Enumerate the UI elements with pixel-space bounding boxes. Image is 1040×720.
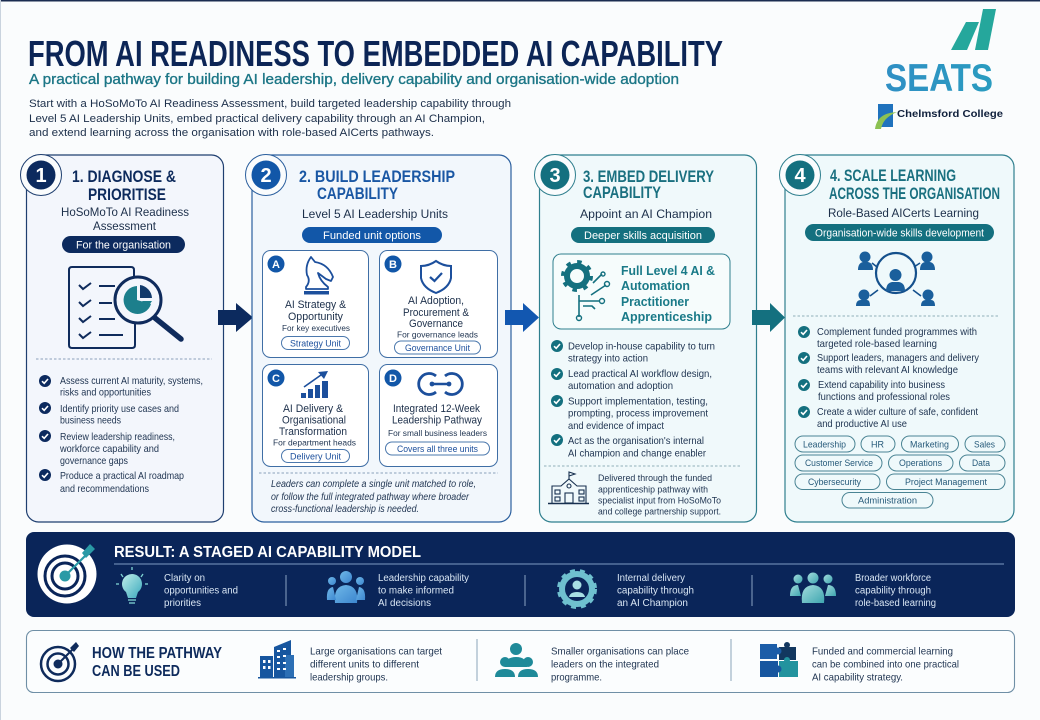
step badge 3 — [534, 154, 576, 196]
card A — [262, 250, 368, 358]
result item: clarity: Clarity on — [164, 573, 205, 584]
card B: Governance Unit — [405, 343, 470, 353]
role chips: Data — [972, 458, 991, 468]
bullets: targeted role-based learning — [817, 339, 937, 350]
note: Leaders can complete a single unit matched to role, — [271, 479, 476, 490]
card C: C — [272, 373, 280, 385]
logo: Chelmsford College: Chelmsford College — [897, 108, 1003, 120]
card C: For department heads — [273, 438, 356, 448]
bullets: Lead practical AI workflow design, — [568, 369, 712, 380]
bullets: strategy into action — [568, 354, 648, 364]
icon: teal people — [495, 643, 538, 677]
heading: CAPABILITY — [583, 183, 662, 202]
subheading: Role-Based AICerts Learning — [828, 206, 979, 220]
bullets: automation and adoption — [568, 381, 673, 392]
item: smaller organisations: programme. — [551, 672, 602, 684]
result item: internal delivery: an AI Champion — [617, 598, 688, 609]
intro text: Start with a HoSoMoTo AI Readiness Assessment, build targeted leadership capability through — [29, 98, 511, 110]
icon: light bulb — [116, 567, 148, 603]
result item: broader workforce: Broader workforce — [855, 573, 931, 584]
icon: shield — [421, 261, 451, 293]
result item: internal delivery: Internal delivery — [617, 573, 685, 584]
result item: leadership capability — [327, 571, 469, 609]
heading: CAN BE USED — [92, 663, 180, 680]
role chips: Leadership — [803, 440, 846, 450]
card C: Organisational — [282, 414, 346, 426]
pill — [62, 236, 185, 253]
bullets: Produce a practical AI roadmap — [60, 471, 184, 482]
role chips — [795, 436, 1005, 508]
heading — [583, 167, 715, 202]
card C: AI Delivery & — [283, 403, 344, 415]
card D: D — [389, 373, 397, 385]
step badge 4 — [780, 154, 820, 196]
panel: 4 scale learning — [780, 154, 1014, 522]
logo: Chelmsford College — [875, 104, 1003, 129]
icon: chain link — [419, 374, 462, 395]
icon: people blue — [327, 571, 365, 603]
panel: 1 diagnose and prioritise — [20, 154, 224, 522]
card B: B — [389, 259, 397, 271]
icon: checklist and magnifier — [69, 267, 181, 348]
card B: For governance leads — [397, 330, 478, 340]
delivery note: apprenticeship pathway with — [598, 484, 708, 494]
card C — [262, 364, 368, 466]
card B — [380, 250, 498, 358]
heading — [92, 645, 222, 680]
bullets: and productive AI use — [817, 419, 907, 430]
subheading: Level 5 AI Leadership Units — [302, 207, 448, 221]
result item: leadership capability: Leadership capability — [378, 573, 469, 584]
role chips: HR — [871, 440, 884, 450]
bullets: AI champion and change enabler — [568, 448, 707, 460]
card D: Leadership Pathway — [392, 414, 483, 426]
result item: clarity: opportunities and — [164, 586, 238, 596]
result item: internal delivery — [558, 570, 694, 609]
result item: broader workforce — [790, 572, 936, 609]
apprenticeship box: Full Level 4 AI & — [621, 263, 715, 278]
intro text — [29, 98, 511, 139]
step badge 1: 1 — [35, 165, 47, 187]
bullets: Create a wider culture of safe, confident — [817, 407, 978, 418]
role chips: Marketing — [910, 440, 949, 450]
item: funded and commercial: Funded and commercial learning — [812, 646, 953, 658]
heading: 2. BUILD LEADERSHIP — [299, 167, 455, 186]
bullets: functions and professional roles — [818, 392, 950, 403]
item: large organisations: Large organisations can target — [310, 646, 442, 658]
card A: For key executives — [282, 323, 350, 333]
heading: RESULT: A STAGED AI CAPABILITY MODEL — [114, 544, 421, 561]
intro text: and extend learning across the organisation with role-based AICerts pathways. — [29, 127, 434, 139]
card B: AI Adoption, — [408, 295, 464, 307]
pill: For the organisation — [76, 240, 171, 252]
heading: PRIORITISE — [88, 185, 166, 204]
bullets: governance gaps — [60, 456, 128, 467]
panel: 3 embed delivery capability — [534, 154, 756, 522]
item: smaller organisations — [495, 643, 689, 684]
pill — [302, 227, 442, 243]
heading: 4. SCALE LEARNING — [830, 166, 956, 185]
note: or follow the full integrated pathway where broader — [271, 492, 470, 503]
role chips: Administration — [858, 496, 917, 506]
pill — [805, 224, 994, 241]
bullets: business needs — [60, 416, 121, 426]
result item: broader workforce: role-based learning — [855, 598, 936, 609]
bullets: Complement funded programmes with — [817, 327, 977, 338]
bullets: Extend capability into business — [818, 380, 945, 391]
delivery note: and college partnership support. — [598, 506, 721, 516]
role chips: Project Management — [905, 477, 987, 487]
pill — [571, 227, 715, 243]
card B: Governance — [409, 318, 463, 330]
bullets: Review leadership readiness, — [60, 432, 175, 443]
bullets: Identify priority use cases and — [60, 404, 179, 415]
card D — [380, 364, 498, 466]
item: large organisations — [258, 640, 442, 684]
pill: Deeper skills acquisition — [584, 230, 702, 242]
card B: Procurement & — [403, 307, 470, 319]
role chips: Customer Service — [805, 458, 873, 468]
item: funded and commercial: can be combined into one practical — [812, 658, 959, 670]
subheading — [61, 205, 189, 233]
arrow: step 3 to 4 — [752, 303, 785, 332]
apprenticeship box: Automation — [621, 278, 690, 293]
icon: people teal — [790, 572, 836, 603]
icon: gear with person — [558, 570, 596, 608]
icon: college building — [548, 472, 589, 504]
icon: chess knight — [304, 257, 333, 294]
result item: internal delivery: capability through — [617, 586, 694, 596]
heading: 1. DIAGNOSE & — [72, 167, 176, 186]
apprenticeship box: Apprenticeship — [621, 309, 712, 324]
card D: Integrated 12-Week — [393, 403, 481, 415]
result item: clarity — [116, 567, 238, 609]
icon: target — [41, 642, 79, 681]
card A: A — [272, 259, 280, 271]
step badge 1 — [20, 154, 62, 196]
item: smaller organisations: leaders on the integrated — [551, 658, 659, 670]
delivery note: specialist input from HoSoMoTo — [598, 496, 721, 506]
bullets: Support implementation, testing, — [568, 396, 708, 408]
heading — [72, 167, 176, 204]
heading: CAPABILITY — [317, 184, 399, 203]
step badge 2: 2 — [260, 165, 272, 187]
apprenticeship box — [553, 254, 730, 329]
logo: SEATS — [885, 9, 996, 100]
card A: Opportunity — [288, 311, 344, 323]
subheading: HoSoMoTo AI Readiness — [61, 205, 189, 219]
how the pathway can be used band — [26, 630, 1014, 692]
card C: Delivery Unit — [290, 452, 341, 462]
card D: For small business leaders — [388, 428, 487, 438]
step badge 2 — [246, 154, 286, 196]
result item: leadership capability: AI decisions — [378, 598, 431, 609]
subheading: Appoint an AI Champion — [580, 207, 712, 221]
bullets: and recommendations — [60, 484, 149, 495]
bullets: risks and opportunities — [60, 388, 151, 398]
arrow: step 2 to 3 — [505, 303, 539, 332]
pill: Organisation-wide skills development — [815, 228, 984, 240]
heading — [829, 166, 1000, 203]
icon: growth chart — [301, 371, 328, 398]
item: large organisations: leadership groups. — [310, 672, 388, 684]
arrow: step 1 to 2 — [218, 303, 253, 332]
bullets: Assess current AI maturity, systems, — [60, 376, 203, 387]
bullets: teams with relevant AI knowledge — [817, 365, 958, 376]
result band — [26, 532, 1015, 617]
bullets: prompting, process improvement — [568, 408, 708, 420]
role chips: Operations — [899, 458, 942, 468]
subtitle: A practical pathway for building AI leadership, delivery capability and organisation-wide adoption — [29, 71, 679, 88]
note: cross-functional leadership is needed. — [271, 504, 419, 515]
card C: Transformation — [279, 426, 347, 438]
delivery note: Delivered through the funded — [598, 473, 712, 483]
icon: target with dart — [38, 544, 96, 604]
delivery note — [598, 473, 721, 516]
bullets: workforce capability and — [59, 444, 159, 455]
item: funded and commercial: AI capability strategy. — [812, 672, 903, 684]
bullets: Support leaders, managers and delivery — [817, 353, 980, 364]
title: FROM AI READINESS TO EMBEDDED AI CAPABILITY — [28, 33, 723, 74]
card D: Covers all three units — [397, 444, 478, 454]
result item: leadership capability: to make informed — [378, 586, 454, 596]
heading — [299, 167, 455, 203]
pill: Funded unit options — [323, 230, 422, 242]
bullets: and evidence of impact — [568, 421, 664, 432]
icon: office building — [258, 640, 296, 678]
heading: 3. EMBED DELIVERY — [583, 167, 715, 186]
bullets: Develop in-house capability to turn — [568, 342, 715, 352]
icon: puzzle — [760, 642, 798, 677]
apprenticeship box: Practitioner — [621, 294, 689, 309]
card A: Strategy Unit — [290, 338, 341, 348]
role chips: Cybersecurity — [808, 477, 861, 487]
step badge 3: 3 — [549, 165, 561, 187]
intro text: Level 5 AI Leadership Units, embed practical delivery capability through an AI Champion, — [29, 113, 485, 125]
card A: AI Strategy & — [285, 299, 347, 311]
step badge 4: 4 — [794, 165, 806, 187]
result item: broader workforce: capability through — [855, 586, 931, 596]
bullets — [39, 375, 203, 495]
bullets — [551, 340, 715, 460]
item: funded and commercial — [760, 642, 959, 684]
bullets — [798, 326, 980, 430]
icon: connected people — [856, 252, 935, 306]
role chips: Sales — [974, 440, 995, 450]
bullets: Act as the organisation's internal — [568, 436, 704, 447]
heading: HOW THE PATHWAY — [92, 645, 222, 662]
subheading: Assessment — [93, 219, 157, 233]
panel: 2 build leadership capability — [246, 154, 511, 522]
item: smaller organisations: Smaller organisations can place — [551, 646, 689, 658]
result item: clarity: priorities — [164, 598, 201, 609]
icon: gear and circuit — [563, 262, 610, 320]
note — [271, 479, 476, 515]
item: large organisations: different units to different — [310, 658, 419, 670]
logo: SEATS: SEATS — [885, 57, 993, 100]
